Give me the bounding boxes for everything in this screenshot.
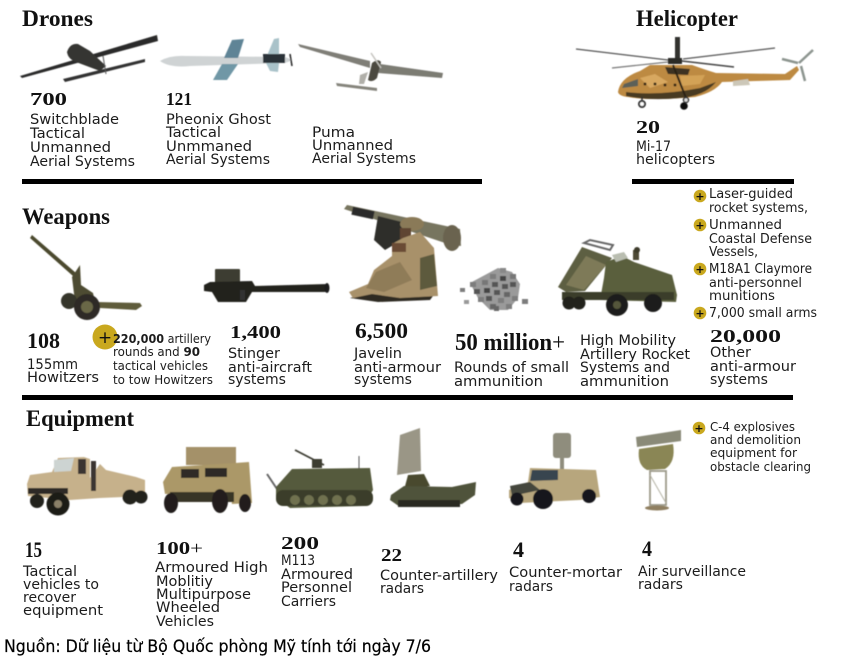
stat: 4 air surveillance radars: 4 [642,536,652,561]
list: additional weapons [694,187,817,321]
heading: Equipment: Equipment [26,406,134,431]
stat: 100+ Humvees: Wheeled [156,600,220,616]
stat: HIMARS text: Systems and [580,360,670,376]
stat: 22 counter-artillery radars: radars [380,581,424,597]
stat: 4 counter-mortar radars: Counter-mortar [509,565,622,581]
stat: 22 counter-artillery radars: 22 [381,545,402,565]
icon: HIMARS launcher [558,240,677,316]
heading: Weapons: Weapons [22,204,110,229]
stat: 50 million+ rounds: ammunition [454,374,543,390]
stat: 6,500 Javelin [353,318,441,388]
source note: Nguồn: Dữ liệu từ Bộ Quốc phòng Mỹ tính tới ngày 7/6 [4,637,431,656]
icon: Javelin soldier [344,205,461,302]
list: additional weapons: + [695,263,705,276]
icon: howitzer [30,235,142,320]
stat: 50 million+ rounds [454,330,569,390]
stat: 4 air surveillance radars [638,536,746,593]
stat: 20,000 other anti-armour [710,326,796,388]
stat: 20 Mi-17: Mi-17 [636,139,671,155]
stat: 200 M113: M113 [281,553,315,569]
stat: 15 tactical vehicles: 15 [25,537,42,562]
stat: 1,400 Stinger: anti-aircraft [228,360,312,376]
stat: 4 air surveillance radars: Air surveillance [638,564,746,580]
stat: 6,500 Javelin: systems [354,372,412,388]
list: additional weapons: + [695,219,705,232]
callout: artillery rounds and tactical vehicles: + [98,328,112,348]
callout: C-4 explosives: obstacle clearing [710,460,811,474]
icon: Mi-17 helicopter [576,37,813,110]
stat: 6,500 Javelin: 6,500 [355,318,408,343]
stat: 15 tactical vehicles [22,537,103,619]
stat: 20 Mi-17: helicopters [636,152,715,168]
stat: 6,500 Javelin: Javelin [353,346,402,362]
icon: Phoenix Ghost drone [160,38,293,80]
stat: 121 Phoenix Ghost: Pheonix Ghost [166,112,271,128]
stat: Puma: Puma [312,125,355,141]
stat: 700 Switchblade: Tactical [29,126,85,142]
stat: 200 M113: 200 [281,533,319,553]
stat: 4 counter-mortar radars [509,537,622,595]
callout: artillery rounds and tactical vehicles: to tow Howitzers [113,373,213,387]
stat: 4 counter-mortar radars: radars [509,579,553,595]
section: equipment [22,406,811,630]
section: weapons [22,187,817,390]
stat: 200 M113: Carriers [281,594,336,610]
stat: HIMARS text [580,333,690,390]
stat: 20,000 other anti-armour: anti-armour [710,359,796,375]
stat: 15 tactical vehicles: equipment [23,603,103,619]
stat: 121 Phoenix Ghost: 121 [166,89,192,109]
stat: 100+ Humvees: Armoured High [155,560,268,576]
list: additional weapons: 7,000 small arms [709,306,817,321]
stat: 100+ Humvees: Moblitiy [156,574,213,590]
stat: 15 tactical vehicles: vehicles to [23,577,99,593]
stat: 100+ Humvees: Multipurpose [156,587,251,603]
stat: 50 million+ rounds: Rounds of small [454,360,569,376]
stat: 700 Switchblade: Aerial Systems [30,154,135,170]
icon: counter-artillery radar [390,428,476,507]
stat: 20,000 other anti-armour: systems [710,372,768,388]
icon: air surveillance radar [636,430,681,510]
callout: C-4 explosives [693,420,811,474]
stat: 15 tactical vehicles: recover [23,590,76,606]
list: additional weapons: rocket systems, [709,201,808,216]
icon: recovery truck [27,457,148,516]
stat: 22 counter-artillery radars [380,545,498,597]
stat: 100+ Humvees [155,538,268,630]
stat: 108 Howitzers: 108 [27,328,60,353]
stat: 108 Howitzers [27,328,99,386]
stat: HIMARS text: Artillery Rocket [580,347,690,363]
stat: 700 Switchblade: Unmanned [30,140,111,156]
list: additional weapons: M18A1 Claymore [709,262,812,277]
stat: 100+ Humvees: Vehicles [156,614,214,630]
stat: 15 tactical vehicles: Tactical [22,564,77,580]
callout: C-4 explosives: equipment for [710,446,797,460]
stat: 108 Howitzers: Howitzers [27,370,99,386]
callout: artillery rounds and tactical vehicles: 220,000 artillery [113,332,211,346]
stat: 20,000 other anti-armour: 20,000 [710,326,781,346]
list: additional weapons: + [695,190,705,203]
stat: 20 Mi-17: 20 [636,117,660,137]
list: additional weapons: munitions [709,289,775,304]
section: drones [20,6,443,170]
stat: 20,000 other anti-armour: Other [710,345,751,361]
icon: M113 carrier [267,450,373,508]
icon: Switchblade drone [20,35,158,82]
heading: Drones: Drones [22,6,93,31]
stat: HIMARS text: High Mobility [580,333,676,349]
icon: Stinger launcher [204,269,330,302]
callout: C-4 explosives: C-4 explosives [710,420,795,434]
callout: C-4 explosives: and demolition [710,433,801,447]
list: additional weapons: anti-personnel [709,276,802,291]
stat: 100+ Humvees: 100 + [156,538,203,558]
stat: 121 Phoenix Ghost: Aerial Systems [166,152,270,168]
stat: 700 Switchblade: Switchblade [30,112,119,128]
list: additional weapons: + [695,307,705,320]
stat: 50 million+ rounds: 50 million+ [455,330,565,356]
stat: 108 Howitzers: 155mm [27,357,78,373]
heading: Helicopter: Helicopter [636,6,738,31]
stat: 121 Phoenix Ghost [165,89,271,168]
stat: 20 Mi-17 [636,117,715,168]
icon: small ammunition [460,268,528,311]
stat: 1,400 Stinger [228,322,312,388]
stat: HIMARS text: ammunition [580,374,669,390]
stat: 200 M113 [281,533,353,610]
icon: armoured Humvee [163,447,252,513]
section: helicopter [576,6,813,168]
icon: Puma drone [298,44,443,91]
stat: Puma: Unmanned [312,138,393,154]
stat: 200 M113: Armoured [281,567,353,583]
stat: 700 Switchblade [29,89,135,170]
stat: 1,400 Stinger: Stinger [228,346,280,362]
stat: 6,500 Javelin: anti-armour [354,360,441,376]
callout: artillery rounds and tactical vehicles [92,324,213,387]
stat: 700 Switchblade: 700 [30,89,67,109]
stat: Puma [312,125,416,167]
list: additional weapons: Unmanned [709,218,782,233]
callout: artillery rounds and tactical vehicles: rounds and 90 [113,345,200,359]
stat: 22 counter-artillery radars: Counter-artillery [380,568,498,584]
stat: 200 M113: Personnel [281,580,352,596]
list: additional weapons: Vessels, [709,245,758,260]
list: additional weapons: Coastal Defense [709,232,812,247]
stat: 4 counter-mortar radars: 4 [513,537,524,562]
icon: counter-mortar radar Humvee [509,433,600,509]
callout: artillery rounds and tactical vehicles: tactical vehicles [113,359,208,373]
callout: C-4 explosives: + [694,422,704,435]
stat: 1,400 Stinger: 1,400 [230,322,281,342]
stat: Puma: Aerial Systems [312,151,416,167]
stat: 121 Phoenix Ghost: Tactical [165,125,221,141]
list: additional weapons: Laser-guided [709,187,793,202]
stat: 121 Phoenix Ghost: Unmmaned [166,139,252,155]
stat: 1,400 Stinger: systems [228,372,286,388]
stat: 4 air surveillance radars: radars [638,577,683,593]
